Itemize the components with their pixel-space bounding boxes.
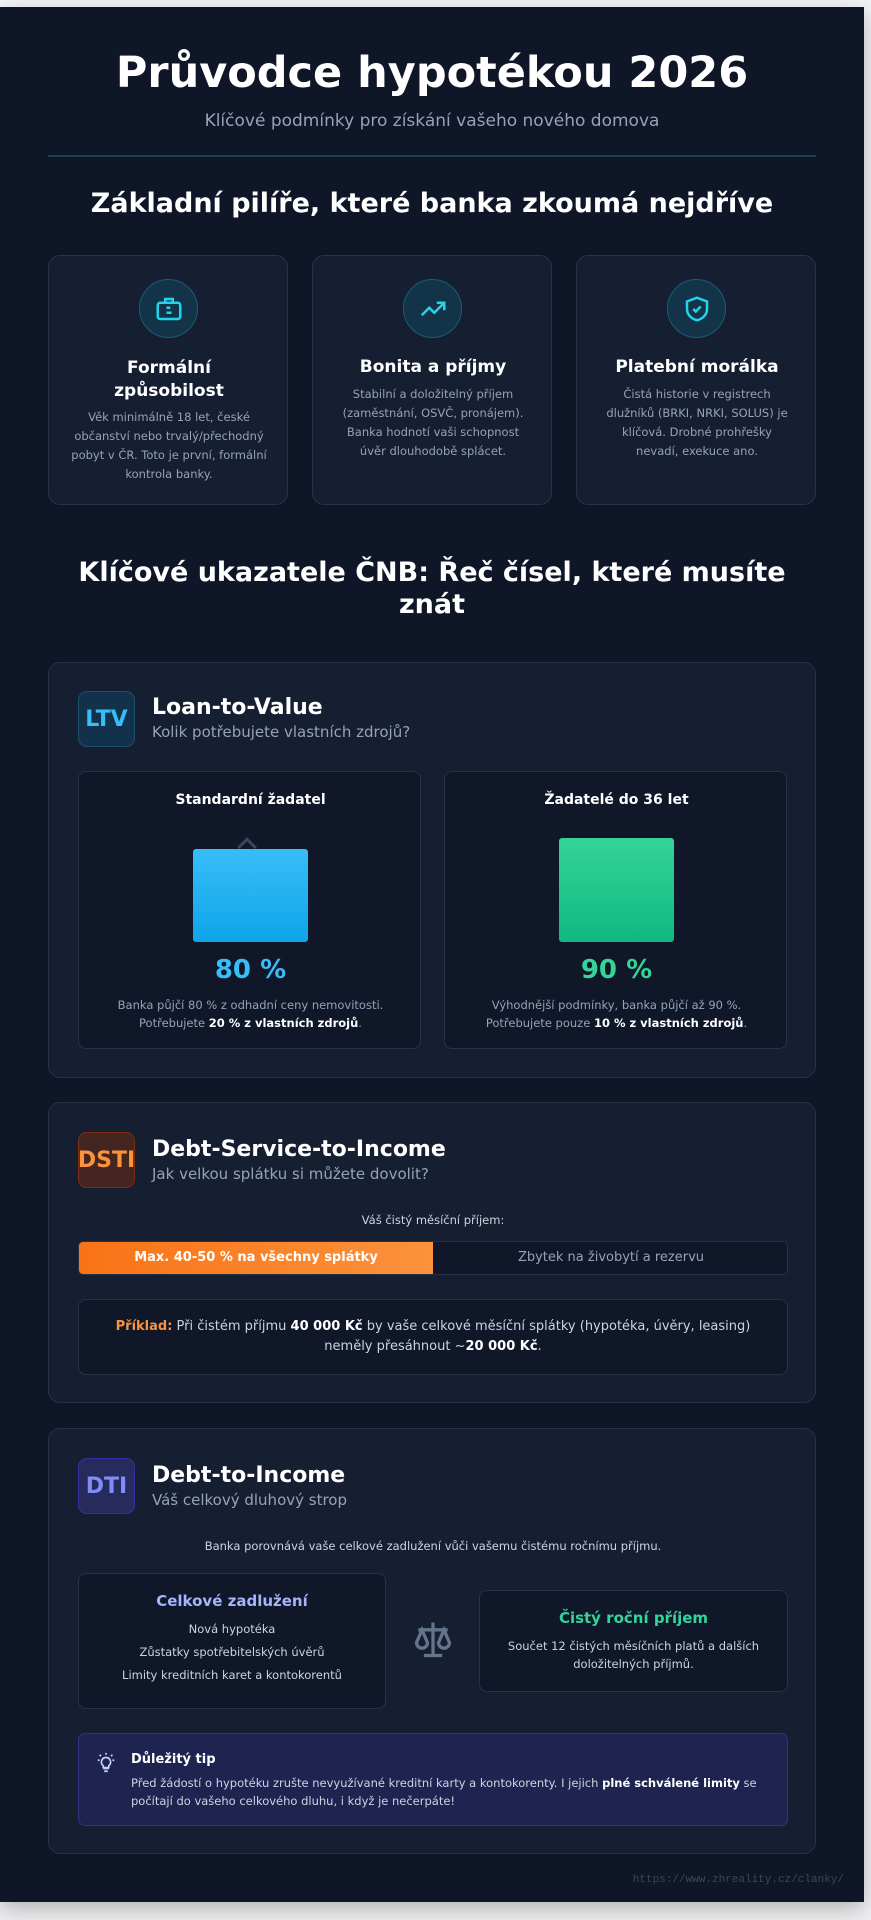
subcard: under 36: Výhodnější podmínky, banka půjčí až 90 %. <box>492 998 741 1012</box>
icon: shield <box>667 279 726 338</box>
subcard: under 36: Žadatelé do 36 let <box>544 792 689 808</box>
panel: DTI <box>48 1428 816 1854</box>
subtitle: Kolik potřebujete vlastních zdrojů? <box>152 723 410 741</box>
box: total debt: Limity kreditních karet a kontokorentů <box>122 1668 342 1682</box>
icon: id card <box>139 279 198 338</box>
subcard: standard <box>78 771 421 1049</box>
badge DTI <box>78 1458 135 1514</box>
panel: payment morale <box>576 255 816 505</box>
text: Věk minimálně 18 let, české občanství nebo trvalý/přechodný pobyt v ČR. Toto je první, formální kontrola banky. <box>71 410 267 481</box>
panel: income <box>312 255 552 505</box>
example box: Příklad: Při čistém příjmu 40 000 Kč by vaše celkové měsíční splátky (hypotéka, úvěry, leasing) <box>116 1319 750 1334</box>
panel: DSTI <box>48 1102 816 1403</box>
badge DSTI: DSTI <box>78 1148 135 1172</box>
heading: způsobilost <box>114 381 224 401</box>
badge LTV: LTV <box>85 706 128 732</box>
heading: Platební morálka <box>615 357 779 377</box>
heading: Loan-to-Value <box>152 695 323 720</box>
bar 90 <box>559 838 674 942</box>
subcard: standard: Standardní žadatel <box>175 792 326 808</box>
box: total debt: Nová hypotéka <box>189 1622 275 1636</box>
panel: formal eligibility <box>48 255 288 505</box>
box: total debt: Zůstatky spotřebitelských úvěrů <box>139 1645 325 1659</box>
bar: DSTI split: Max. 40-50 % na všechny splátky <box>134 1250 378 1265</box>
subcard: standard: 80 % <box>215 955 286 985</box>
box: net annual income: Součet 12 čistých měsíčních platů a dalších doložitelných příjmů. <box>508 1639 759 1671</box>
heading <box>114 358 224 401</box>
subcard: under 36 <box>444 771 787 1049</box>
subcard: standard: Potřebujete 20 % z vlastních zdrojů. <box>139 1016 362 1030</box>
heading: Bonita a příjmy <box>360 357 506 377</box>
text: Stabilní a doložitelný příjem (zaměstnání, OSVČ, pronájem). Banka hodnotí vaši schopnost úvěr dlouhodobě splácet. <box>343 387 523 458</box>
callout: tip <box>78 1733 788 1826</box>
subcard: under 36: Potřebujete pouze 10 % z vlastních zdrojů. <box>486 1016 747 1030</box>
box: net annual income <box>479 1590 788 1692</box>
example box <box>78 1299 788 1375</box>
badge DTI: DTI <box>86 1474 127 1498</box>
icon: trend <box>403 279 462 338</box>
intro text: Banka porovnává vaše celkové zadlužení vůči vašemu čistému ročnímu příjmu. <box>205 1539 661 1553</box>
label: Váš čistý měsíční příjem: <box>362 1213 504 1227</box>
title: Průvodce hypotékou 2026 <box>116 48 748 98</box>
bar: DSTI split <box>78 1241 788 1275</box>
roof caret <box>237 837 257 857</box>
example box: neměly přesáhnout ~20 000 Kč. <box>324 1339 542 1354</box>
subtitle: Klíčové podmínky pro získání vašeho nového domova <box>205 111 659 131</box>
heading: Formální <box>127 358 211 378</box>
icon: bulb <box>98 1752 114 1772</box>
footer url: https://www.zhreality.cz/clanky/ <box>633 1874 844 1886</box>
subcard: standard: Banka půjčí 80 % z odhadní ceny nemovitosti. <box>118 998 383 1012</box>
bar: DSTI split: Zbytek na živobytí a rezervu <box>518 1250 704 1265</box>
section heading: CNB: Klíčové ukazatele ČNB: Řeč čísel, které musíte znát <box>78 557 786 620</box>
icon: scales <box>414 1622 452 1658</box>
badge DSTI <box>78 1132 135 1188</box>
heading: Debt-to-Income <box>152 1463 345 1488</box>
subtitle: Jak velkou splátku si můžete dovolit? <box>152 1165 429 1183</box>
badge LTV <box>78 691 135 747</box>
heading: Debt-Service-to-Income <box>152 1137 446 1162</box>
callout: tip: Před žádostí o hypotéku zrušte nevyužívané kreditní karty a kontokorenty. I jejich plné schválené limity se počítají do vašeho celkového dluhu, i když je nečerpáte! <box>131 1776 757 1808</box>
subcard: under 36: 90 % <box>581 955 652 985</box>
callout: tip: Důležitý tip <box>131 1752 216 1767</box>
section heading: pillars: Základní pilíře, které banka zkoumá nejdříve <box>91 188 773 219</box>
box: total debt <box>78 1573 386 1709</box>
box: total debt: Celkové zadlužení <box>156 1592 308 1610</box>
panel: LTV <box>48 662 816 1078</box>
box: net annual income: Čistý roční příjem <box>559 1609 708 1627</box>
bar 80 <box>193 849 308 942</box>
text: Čistá historie v registrech dlužníků (BRKI, NRKI, SOLUS) je klíčová. Drobné prohřešky nevadí, exekuce ano. <box>606 387 788 458</box>
subtitle: Váš celkový dluhový strop <box>152 1491 347 1509</box>
